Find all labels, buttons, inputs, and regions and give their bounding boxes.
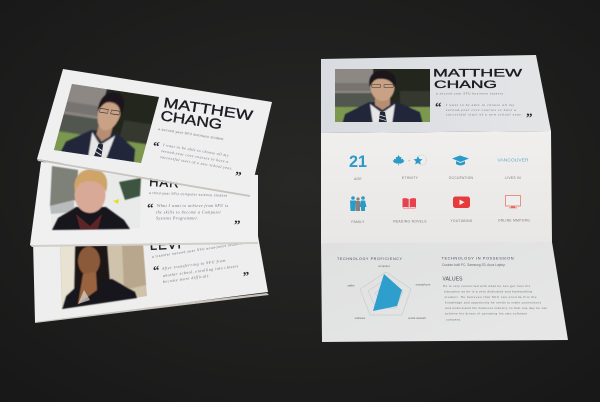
stat: ethnicity — [393, 155, 426, 180]
quote: become more difficult. — [162, 273, 210, 284]
stat: age — [349, 152, 367, 181]
stat: online mmporg — [498, 196, 530, 222]
name heading: MATTHEW — [433, 68, 523, 80]
values paragraph: student. He believes that SFU can provide him the — [444, 295, 537, 299]
panel: icon grid background — [321, 131, 552, 243]
quote: “ — [147, 200, 154, 215]
subtitle: a third year SFU computer science student — [149, 191, 227, 198]
photo: Matthew — [333, 67, 433, 124]
photo: Matthew — [51, 81, 162, 166]
name heading: CHANG — [434, 79, 497, 91]
subtitle: a second year SFU business student — [436, 92, 503, 96]
values paragraph: and understand the business industry so that one day he can — [445, 306, 547, 310]
stat: family: FAMILY — [351, 220, 365, 224]
name heading — [433, 68, 523, 91]
radar chart: tablet — [348, 284, 355, 288]
values paragraph: company. — [446, 318, 461, 322]
card: second student — [30, 162, 258, 247]
quote block: second-year core courses to have a — [446, 108, 516, 112]
brochure stack on the left — [30, 69, 272, 323]
stat: ethnicity: ETHNITY — [402, 176, 419, 180]
quote: I want to be able to choose all my — [162, 143, 229, 158]
stat: reading novels — [393, 198, 427, 224]
stat: occupation: OCCUPATION — [449, 176, 474, 180]
panel: top profile — [321, 55, 551, 133]
heading: technology proficiency: TECHNOLOGY PROFICIENCY — [337, 257, 403, 261]
stat: age: AGE — [354, 177, 362, 181]
subtitle: a second year SFU business student — [158, 127, 224, 141]
stat: youtubing — [450, 196, 473, 223]
quote: “ — [152, 262, 161, 278]
values paragraph: achieve his dream of operating his own software — [445, 312, 527, 316]
stat: online mmporg: ONLINE MMPORG — [498, 218, 530, 222]
quote block: successful start of a new school year. — [446, 112, 522, 116]
quote: What I want to achieve from SFU is — [157, 203, 228, 208]
quote: “ — [152, 138, 161, 154]
quote: the skills to become a Computer — [156, 210, 221, 214]
quote: ” — [242, 268, 250, 284]
panel: bottom details background — [321, 242, 568, 342]
quote block — [435, 99, 532, 125]
quote: another school, enrolling into classes — [162, 263, 239, 279]
stat: lives in: VANCOUVER — [498, 158, 529, 164]
name cropped behind card: HAR — [149, 174, 180, 191]
possession list: Custom-built PC, Samsung S3, Asus Laptop — [442, 263, 505, 267]
name cropped behind card: LEVI — [149, 236, 182, 253]
heading: values: VALUES — [442, 276, 463, 282]
quote block: “ — [435, 99, 442, 114]
stat: family — [350, 196, 366, 224]
card: Matthew Chang — [37, 69, 272, 197]
values paragraph: education as he is a very dedicated and hardworking — [444, 290, 532, 294]
radar chart: social network — [408, 316, 426, 320]
values paragraph: He is very concerned with what he can get from his — [443, 284, 530, 288]
radar chart — [348, 264, 431, 320]
radar chart: computer — [378, 264, 390, 268]
quote: second-year core courses to have a — [161, 149, 229, 164]
stat: lives in — [498, 158, 529, 180]
quote block: I want to be able to choose all my — [445, 103, 514, 107]
values paragraph: knowledge and opportunity he needs to make connections — [445, 300, 541, 304]
quote: ” — [234, 217, 240, 232]
photo: blond man — [50, 166, 141, 230]
quote: ” — [234, 168, 242, 184]
name: CHANG — [160, 107, 223, 132]
quote: Systems Programmer. — [156, 216, 198, 220]
subtitle: a transfer second year SFU economics student — [152, 241, 242, 259]
heading: technology in possession: TECHNOLOGY IN POSSESSION — [442, 256, 514, 260]
quote — [152, 258, 250, 284]
quote block: ” — [526, 110, 532, 125]
stat: youtubing: YOUTUBING — [450, 219, 473, 223]
quote: successful start of a new school year. — [160, 155, 233, 171]
stat: lives in: LIVES IN — [505, 176, 521, 180]
quote: After transferring to SFU from — [160, 258, 226, 271]
quote — [147, 200, 240, 232]
card: third student — [33, 236, 269, 323]
open brochure on the right — [321, 55, 568, 342]
stat: ethnicity: + — [408, 158, 411, 163]
radar chart: software — [355, 316, 366, 320]
name: MATTHEW — [163, 94, 255, 124]
stat: age: 21 — [349, 152, 367, 171]
radar chart: smartphone — [416, 282, 431, 286]
stat: reading novels: READING NOVELS — [393, 220, 427, 224]
quote — [152, 138, 242, 184]
name — [160, 94, 255, 132]
values paragraph — [443, 284, 547, 322]
photo: smiling woman — [60, 245, 147, 309]
stat: occupation — [449, 156, 474, 180]
